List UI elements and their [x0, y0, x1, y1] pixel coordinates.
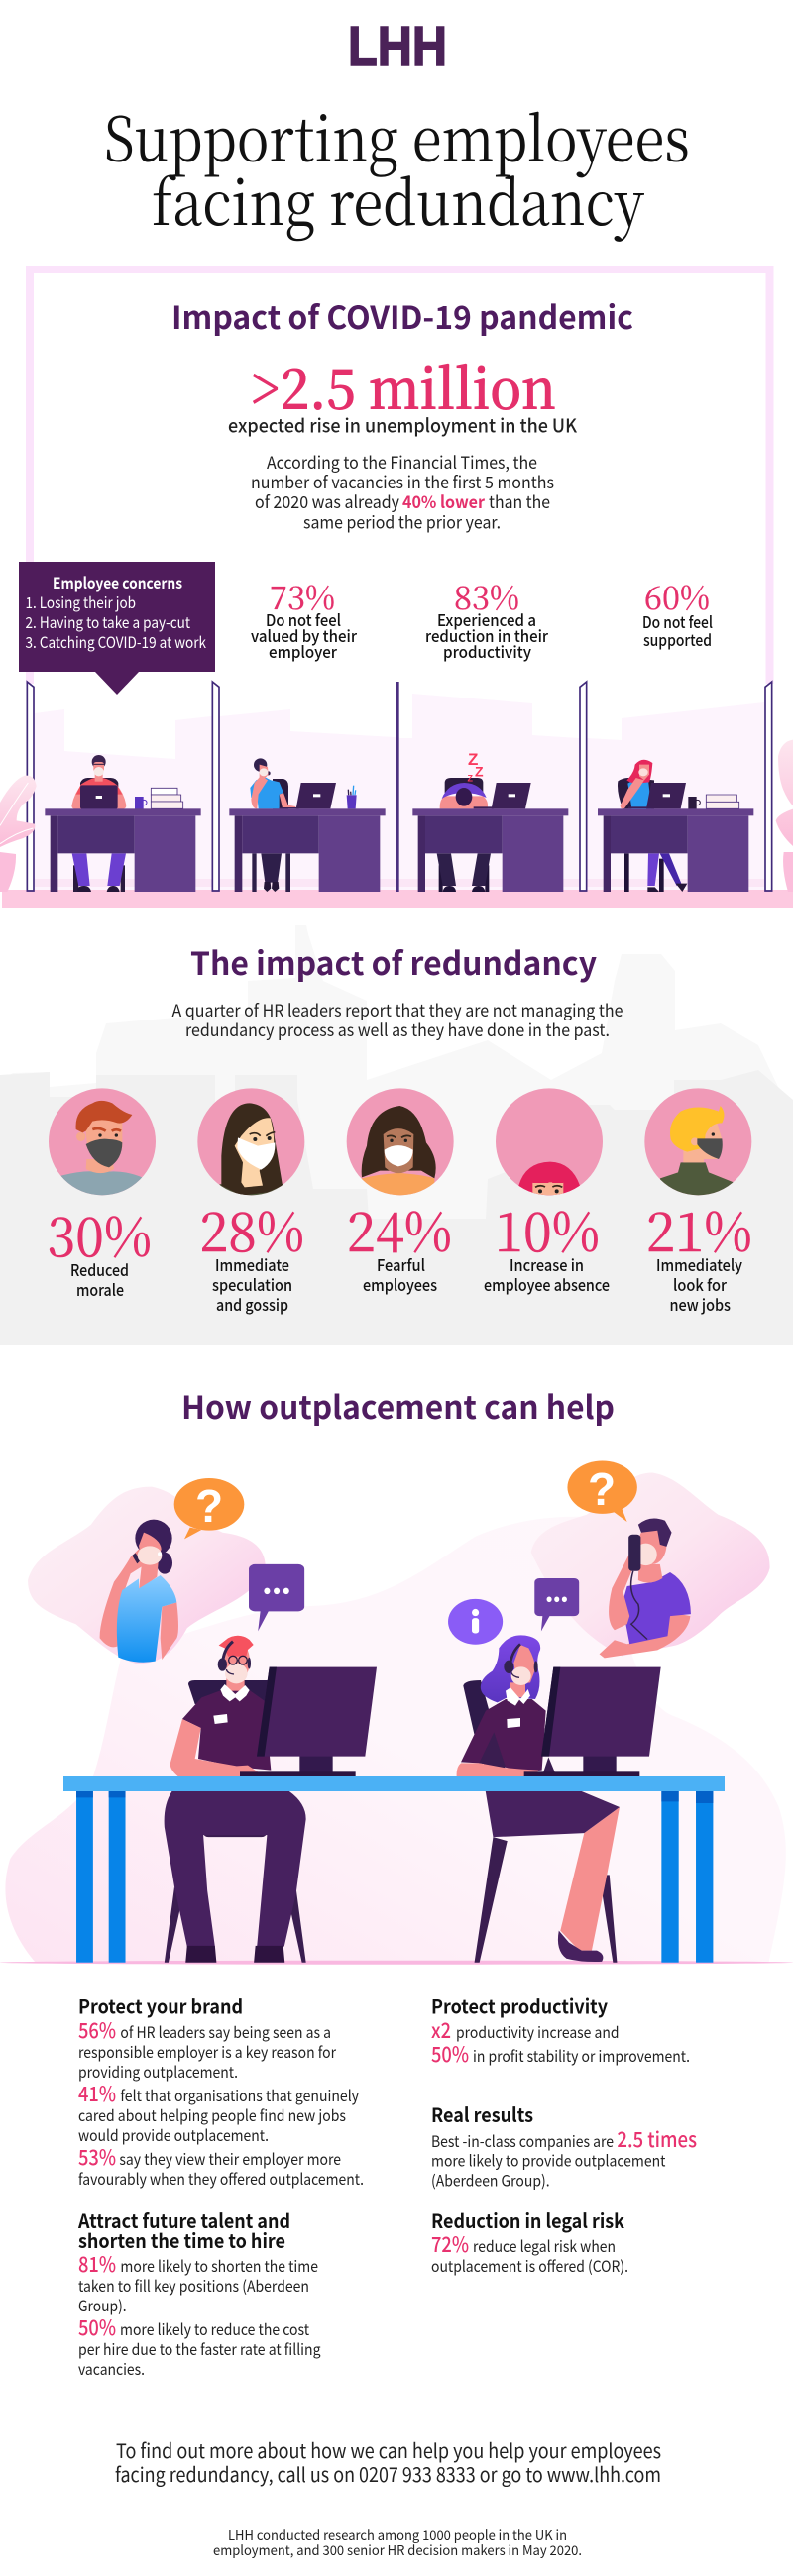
- footnote: [213, 2524, 582, 2559]
- text block: Protect your brand: felt that organisations that genuinely: [120, 2085, 359, 2106]
- icon: sleeping Zs: Z: [468, 750, 478, 769]
- text block: Protect productivity: Protect productivity: [431, 1991, 608, 2020]
- stat: 10% absence: Increase in: [510, 1252, 584, 1276]
- monitor right: [524, 1667, 661, 1776]
- background blob: [5, 1517, 786, 1963]
- face: curly dark hair woman: [347, 1088, 454, 1196]
- female operator legs: [475, 1791, 620, 1963]
- text block: Reduction in legal risk: 72%: [431, 2229, 469, 2259]
- title: Supporting employees: [104, 91, 690, 178]
- text block: Protect your brand: Protect your brand: [78, 1991, 243, 2020]
- call to action: facing redundancy, call us on 0207 933 8333 or go to www.lhh.com: [115, 2459, 661, 2488]
- worker 2: woman resting chin: [250, 758, 357, 892]
- text block: Attract future talent: 81%: [78, 2249, 116, 2279]
- text block: Attract future talent: more likely to reduce the cost: [120, 2318, 309, 2340]
- text block: Reduction in legal risk: [431, 2205, 628, 2277]
- stat: 10% absence: 10%: [495, 1189, 600, 1267]
- left caller figure: [100, 1520, 178, 1663]
- text block: Attract future talent: per hire due to the faster rate at filling: [78, 2338, 321, 2360]
- text block: Protect your brand: cared about helping people find new jobs: [78, 2104, 346, 2126]
- stat: 73%: 73%: [270, 573, 335, 619]
- face circles left: [49, 1088, 454, 1197]
- stat: 24% fearful: 24%: [347, 1189, 452, 1267]
- text block: Protect your brand: favourably when they offered outplacement.: [78, 2168, 364, 2190]
- question marks: ?: [195, 1480, 223, 1532]
- callout: employee concerns: 1. Losing their job: [26, 591, 136, 613]
- stat: 83%: productivity: [443, 639, 531, 663]
- stat: 28% speculation: Immediate: [215, 1252, 289, 1276]
- face: yellow hair side profile: [644, 1088, 751, 1199]
- text block: Protect productivity: in profit stability or improvement.: [473, 2045, 690, 2067]
- text block: Reduction in legal risk: Reduction in legal risk: [431, 2205, 624, 2234]
- left orange question bubble: [174, 1478, 244, 1539]
- partition: [212, 682, 219, 891]
- face: red hair man: [49, 1088, 156, 1196]
- text block: Protect productivity: productivity increase and: [456, 2021, 619, 2043]
- text block: quarter of HR leaders: [172, 997, 623, 1041]
- text block: Protect your brand: of HR leaders say being seen as a: [120, 2021, 331, 2043]
- stat: 28% speculation: [200, 1189, 304, 1316]
- text block: Real results: Real results: [431, 2099, 533, 2128]
- floor line: [0, 1961, 793, 1965]
- text block: Protect your brand: responsible employer is a key reason for: [78, 2041, 337, 2063]
- text block: Protect your brand: 41%: [78, 2079, 116, 2108]
- right orange bubble: [567, 1460, 637, 1522]
- footnote: employment, and 300 senior HR decision makers in May 2020.: [213, 2539, 582, 2559]
- stat: 60%: [642, 573, 713, 651]
- text block: Protect your brand: would provide outplacement.: [78, 2124, 269, 2146]
- stat: 30% reduced morale: morale: [76, 1277, 124, 1301]
- stat: 10% absence: employee absence: [484, 1272, 610, 1296]
- stat: 30% reduced morale: Reduced: [70, 1257, 129, 1281]
- table legs: [76, 1791, 713, 1963]
- stat: 83%: 83%: [454, 573, 519, 619]
- stat: 60%: 60%: [644, 573, 710, 619]
- stat: 30% reduced morale: 30%: [48, 1194, 152, 1272]
- text block: Attract future talent: more likely to shorten the time: [120, 2255, 318, 2277]
- callout: employee concerns: 3. Catching COVID-19 at work: [26, 631, 206, 653]
- heading: Impact of COVID-19 pandemic: Impact of COVID-19 pandemic: [171, 293, 633, 339]
- monitor left: [240, 1667, 377, 1776]
- text block: Attract future talent: 50%: [78, 2312, 116, 2342]
- stat: 24% fearful: employees: [363, 1272, 437, 1296]
- text block: Reduction in legal risk: outplacement is offered (COR).: [431, 2255, 628, 2277]
- right caller: [600, 1518, 691, 1658]
- callout: employee concerns: [19, 562, 215, 695]
- stat: 73%: valued by their: [251, 623, 357, 647]
- title: [104, 91, 690, 243]
- desk 2: [229, 808, 386, 892]
- text block: Financial Times paragraph: same period the prior year.: [303, 509, 501, 533]
- text block: quarter of HR leaders: redundancy process as well as they have done in the past.: [185, 1017, 610, 1041]
- desk 4: [598, 808, 753, 892]
- stat: 73%: [251, 573, 357, 663]
- text block: Real results: Best -in-class companies are: [431, 2130, 614, 2152]
- office right half: two workers: [396, 682, 793, 892]
- text block: Attract future talent: Group).: [78, 2295, 127, 2316]
- left purple chat bubble: [249, 1564, 304, 1631]
- desk 3: [412, 808, 568, 892]
- office left half: two workers: [0, 682, 386, 892]
- text block: Protect productivity: [431, 1991, 690, 2069]
- stat: 28% speculation: and gossip: [216, 1292, 288, 1316]
- table top: [63, 1776, 725, 1791]
- stat: 60%: supported: [643, 627, 712, 651]
- text block: Financial Times paragraph: 40% lower: [402, 488, 486, 513]
- face: long dark hair woman: [197, 1088, 304, 1197]
- text block: Attract future talent: Attract future talent and: [77, 2205, 290, 2234]
- text block: Financial Times paragraph: of 2020 was already: [255, 488, 399, 513]
- stat: 83%: [425, 573, 548, 663]
- icon: sleeping Zs: Z: [468, 773, 474, 783]
- male operator legs: [165, 1791, 306, 1963]
- stat: 21% new jobs: 21%: [646, 1189, 752, 1267]
- text block: Attract future talent: shorten the time to hire: [78, 2225, 285, 2254]
- question marks: ?: [588, 1463, 616, 1515]
- icon: sleeping Zs: Z: [475, 763, 484, 779]
- face circles right: [496, 1088, 751, 1199]
- stat: 60%: Do not feel: [642, 609, 713, 633]
- text block: Protect productivity: x2: [431, 2015, 451, 2045]
- text block: Financial Times paragraph: According to the Financial Times, the: [267, 449, 537, 474]
- blob: left caller: [28, 1487, 266, 1664]
- stat: 83%: Experienced a: [437, 607, 536, 631]
- partition: [396, 682, 399, 892]
- text block: Attract future talent: taken to fill key positions (Aberdeen: [78, 2275, 309, 2297]
- worker 1: front-facing man with laptop: [71, 755, 183, 892]
- stat: 73%: employer: [269, 639, 337, 663]
- question marks: [195, 1463, 616, 1532]
- text block: Protect productivity: 50%: [431, 2039, 469, 2069]
- male operator upper body: [170, 1636, 271, 1776]
- text block: Real results: [431, 2099, 697, 2192]
- stat: 21% new jobs: Immediately: [656, 1252, 742, 1276]
- callout: employee concerns: 2. Having to take a pay-cut: [26, 611, 190, 633]
- background: grey skyline: [0, 925, 793, 1345]
- office backdrop: skyline and floor: [2, 694, 793, 908]
- face: peeking red hair: [496, 1088, 603, 1197]
- text block: Protect your brand: say they view their employer more: [119, 2148, 341, 2170]
- heading: The impact of redundancy: The impact of redundancy: [190, 939, 597, 985]
- stat: 10% absence: [484, 1189, 610, 1296]
- text block: Financial Times paragraph: than the: [489, 488, 550, 513]
- text block: Attract future talent: vacancies.: [78, 2358, 145, 2380]
- plant right: [776, 740, 793, 892]
- stat: 73%: Do not feel: [266, 607, 341, 631]
- text block: Protect your brand: [78, 1991, 364, 2190]
- heading: How outplacement can help: How outplacement can help: [181, 1383, 615, 1429]
- left caller: [100, 1478, 244, 1663]
- worker 4: red hair woman: [618, 760, 739, 892]
- text block: Financial Times paragraph: [251, 449, 554, 533]
- female operator upper body: [457, 1635, 557, 1776]
- worker 3: asleep at desk: [437, 778, 531, 892]
- stat: 28% speculation: 28%: [200, 1189, 304, 1267]
- right purple chat bubble: [534, 1578, 579, 1631]
- text block: Attract future talent: [77, 2205, 321, 2380]
- text block: quarter of HR leaders: A quarter of HR leaders report that they are not managing the: [172, 997, 623, 1021]
- stat: 83%: reduction in their: [425, 623, 548, 647]
- partition: [27, 682, 34, 891]
- stat: 24% fearful: Fearful: [377, 1252, 425, 1276]
- plant left: [0, 776, 37, 892]
- text block: Protect your brand: providing outplacement.: [78, 2061, 238, 2083]
- stat: 2.5 million: >2.5 million: [250, 347, 556, 426]
- text block: Real results: 2.5 times: [617, 2124, 697, 2154]
- text block: Protect your brand: 56%: [78, 2015, 116, 2045]
- text block: Reduction in legal risk: reduce legal risk when: [473, 2235, 616, 2257]
- desk 1: [45, 808, 201, 892]
- blob: right caller: [531, 1473, 770, 1656]
- text block: Protect your brand: 53%: [78, 2142, 116, 2172]
- stat: 28% speculation: speculation: [212, 1272, 292, 1296]
- title: facing redundancy: [152, 155, 645, 243]
- callout: employee concerns: Employee concerns: [53, 572, 182, 593]
- stat: 21% new jobs: [646, 1189, 752, 1316]
- partition: [765, 682, 772, 891]
- icon: sleeping Zs: [468, 750, 484, 783]
- text block: Real results: (Aberdeen Group).: [431, 2170, 550, 2192]
- info icon: [448, 1599, 503, 1645]
- logo: LHH: LHH: [348, 15, 447, 78]
- stat: 21% new jobs: look for: [673, 1272, 727, 1296]
- panel: pink frame: [30, 269, 769, 684]
- call centre backdrop blobs and lower bodies: [0, 1460, 793, 1965]
- call to action: To find out more about how we can help you help your employees: [116, 2435, 661, 2464]
- text block: Financial Times paragraph: number of vacancies in the first 5 months: [251, 469, 554, 493]
- call to action: [115, 2435, 661, 2488]
- stat: 2.5 million: expected rise in unemployment in the UK: [228, 412, 577, 438]
- footnote: LHH conducted research among 1000 people in the UK in: [228, 2524, 567, 2544]
- stat: 21% new jobs: new jobs: [670, 1292, 731, 1316]
- partition: [580, 682, 587, 891]
- text block: Real results: more likely to provide outplacement: [431, 2150, 666, 2172]
